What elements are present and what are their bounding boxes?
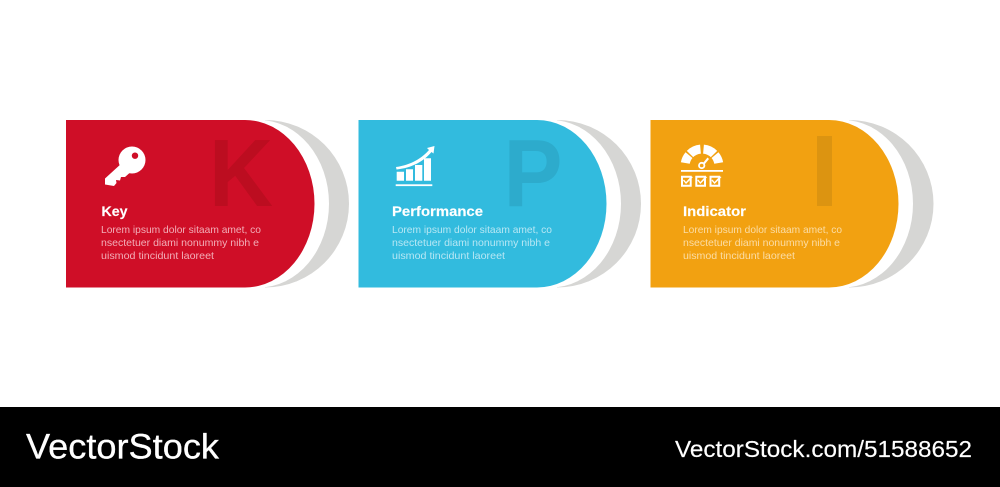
text block: Indicator <box>683 225 842 262</box>
letter K: K <box>209 120 273 227</box>
text block: Key <box>101 225 261 262</box>
footer logo: VectorStock <box>26 428 220 466</box>
orange card <box>650 120 898 288</box>
icon: growth chart <box>396 146 434 186</box>
panel: Indicator <box>650 120 934 288</box>
white layer <box>245 120 329 288</box>
text block: Performance: nsectetuer diami nonummy nibh e <box>392 238 550 249</box>
icon: gauge with checklist <box>681 149 723 187</box>
text block: Performance <box>392 225 552 262</box>
text block: Key: Lorem ipsum dolor sitaam amet, co <box>101 225 261 236</box>
white layer <box>829 120 913 288</box>
white layer <box>537 120 621 288</box>
back shadow shape <box>265 120 349 288</box>
heading: Key: Key <box>102 204 128 219</box>
text block: Indicator: nsectetuer diami nonummy nibh e <box>683 238 840 249</box>
panel: Key <box>66 120 349 288</box>
back shadow shape <box>849 120 934 288</box>
icon: key <box>105 146 146 186</box>
blue card <box>358 120 606 288</box>
heading: Performance: Performance <box>392 204 484 219</box>
letter I <box>817 136 832 206</box>
text block: Performance: uismod tincidunt laoreet <box>392 251 505 262</box>
text block: Key: nsectetuer diami nonummy nibh e <box>101 238 259 249</box>
letter P: P <box>504 120 562 227</box>
heading: Indicator: Indicator <box>683 204 747 219</box>
text block: Indicator: uismod tincidunt laoreet <box>683 251 795 262</box>
text block: Performance: Lorem ipsum dolor sitaam amet, co <box>392 225 552 236</box>
text block: Indicator: Lorem ipsum dolor sitaam amet, co <box>683 225 842 236</box>
back shadow shape <box>557 120 641 288</box>
footer bar <box>0 407 1000 487</box>
text block: Key: uismod tincidunt laoreet <box>101 251 214 262</box>
red card <box>66 120 314 288</box>
panel: Performance <box>358 120 641 288</box>
footer image URL: VectorStock.com/51588652 <box>675 436 972 462</box>
